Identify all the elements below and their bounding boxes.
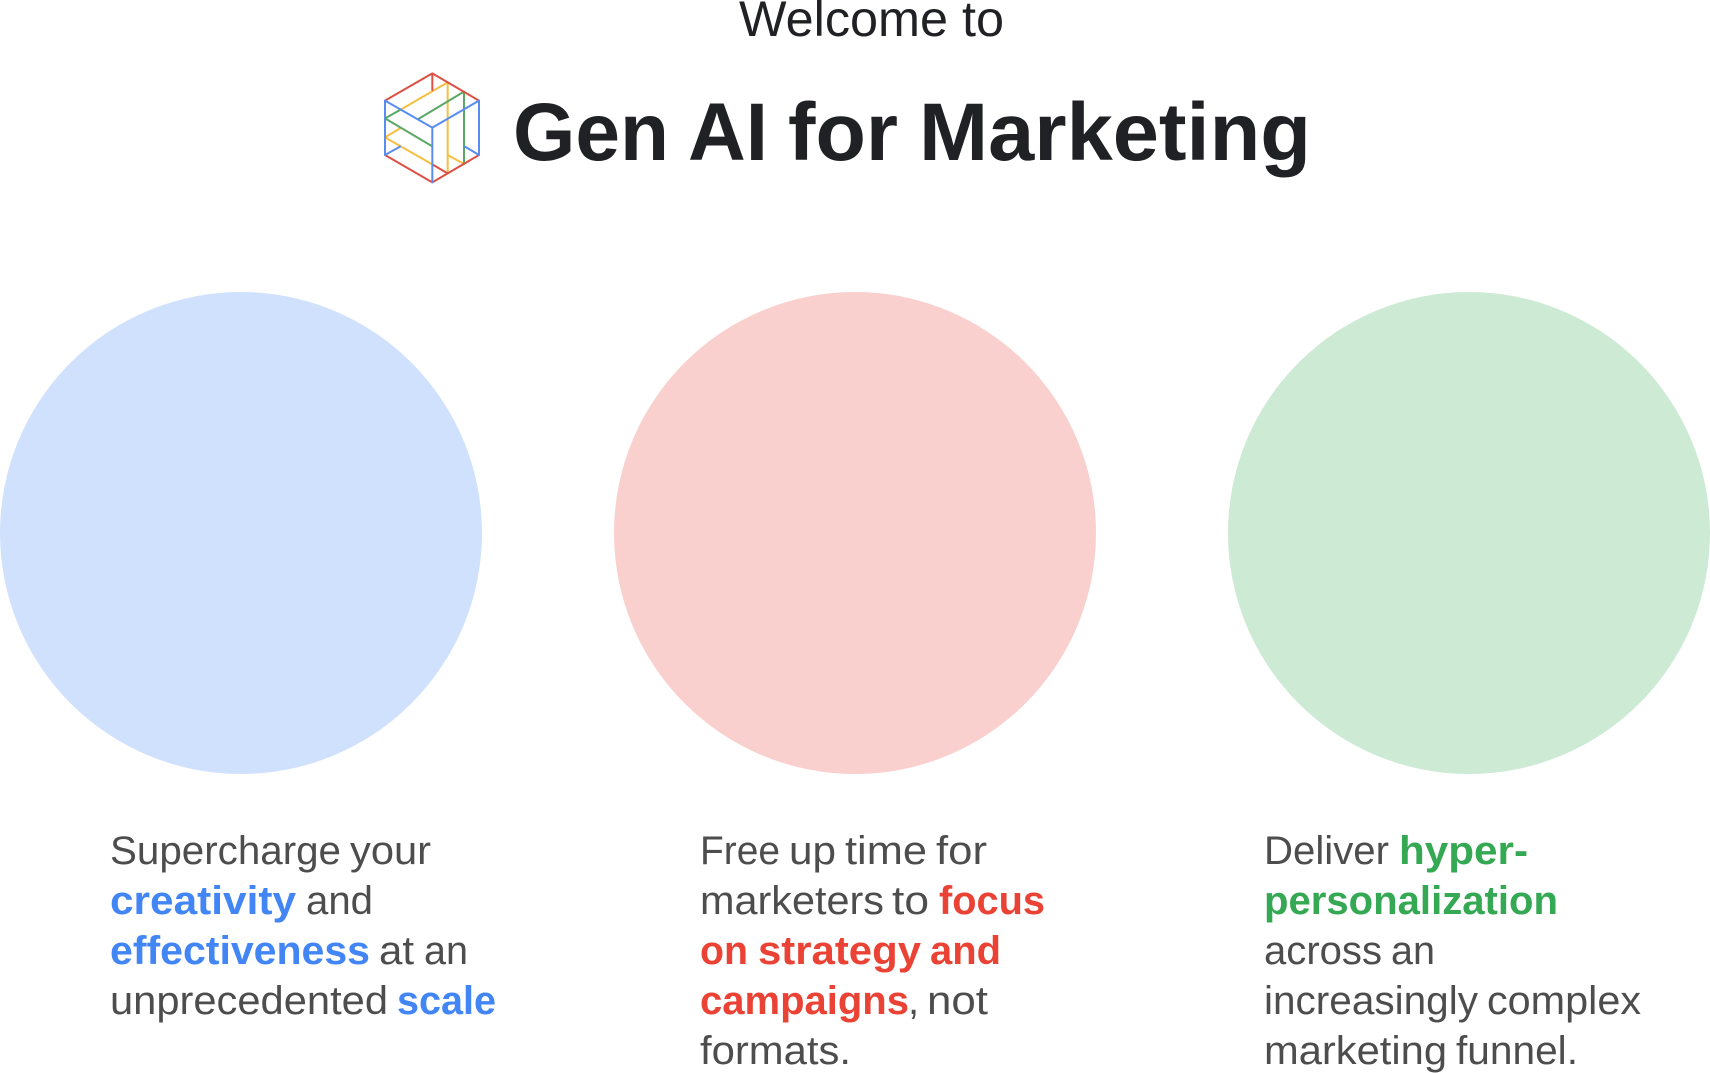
text block: personalization description: increasingly [1264, 979, 1478, 1023]
text block: time savings description: focus [939, 879, 1045, 923]
text block: personalization description: an [1391, 929, 1435, 973]
text block: personalization description: personalization [1264, 879, 1558, 923]
text block: creativity description: an [424, 929, 468, 973]
panel: personalization [1228, 292, 1710, 1073]
text block: creativity description: and [306, 879, 373, 923]
heading: main title: Gen [513, 87, 669, 178]
text block: time savings description: strategy [758, 929, 922, 973]
text block: time savings description: to [892, 879, 929, 923]
text block: personalization description: across [1264, 929, 1382, 973]
text block: time savings description: time [845, 829, 927, 873]
text block: time savings description [700, 829, 1045, 1073]
text block: personalization description: Deliver [1264, 829, 1389, 873]
text block: time savings description: campaigns [700, 979, 909, 1023]
panel: creativity [0, 292, 496, 1023]
text block: creativity description [110, 829, 496, 1023]
text block: time savings description: , [908, 979, 919, 1023]
text block: time savings description: for [936, 829, 987, 873]
text block: time savings description: and [930, 929, 1001, 973]
heading: main title [513, 87, 1311, 178]
text block: creativity description: effectiveness [110, 929, 370, 973]
heading: main title: for [788, 87, 898, 178]
text block: creativity description: Supercharge [110, 829, 341, 873]
icon: geometric cube logo [385, 73, 479, 182]
text block: creativity description: unprecedented [110, 979, 388, 1023]
text block: time savings description: not [927, 979, 988, 1023]
text block: time savings description: marketers [700, 879, 884, 923]
text block: personalization description: marketing [1264, 1029, 1447, 1073]
text block: creativity description: scale [397, 979, 496, 1023]
text block: personalization description: complex [1487, 979, 1641, 1023]
text block: time savings description: on [700, 929, 748, 973]
text block: creativity description: creativity [110, 879, 297, 923]
text block: personalization description [1264, 829, 1641, 1073]
panel: time savings [614, 292, 1096, 1073]
text block: time savings description: formats. [700, 1029, 851, 1073]
text block: personalization description: funnel. [1456, 1029, 1578, 1073]
text block: time savings description: Free [700, 829, 780, 873]
heading: main title: Marketing [919, 87, 1311, 178]
circle: blue placeholder [0, 292, 482, 774]
heading: main title: AI [688, 87, 768, 178]
text block: time savings description: up [789, 829, 836, 873]
text block: personalization description: hyper- [1399, 829, 1528, 873]
circle: green placeholder [1228, 292, 1710, 774]
circle: red placeholder [614, 292, 1096, 774]
text block: creativity description: at [379, 929, 414, 973]
text block: creativity description: your [350, 829, 431, 873]
